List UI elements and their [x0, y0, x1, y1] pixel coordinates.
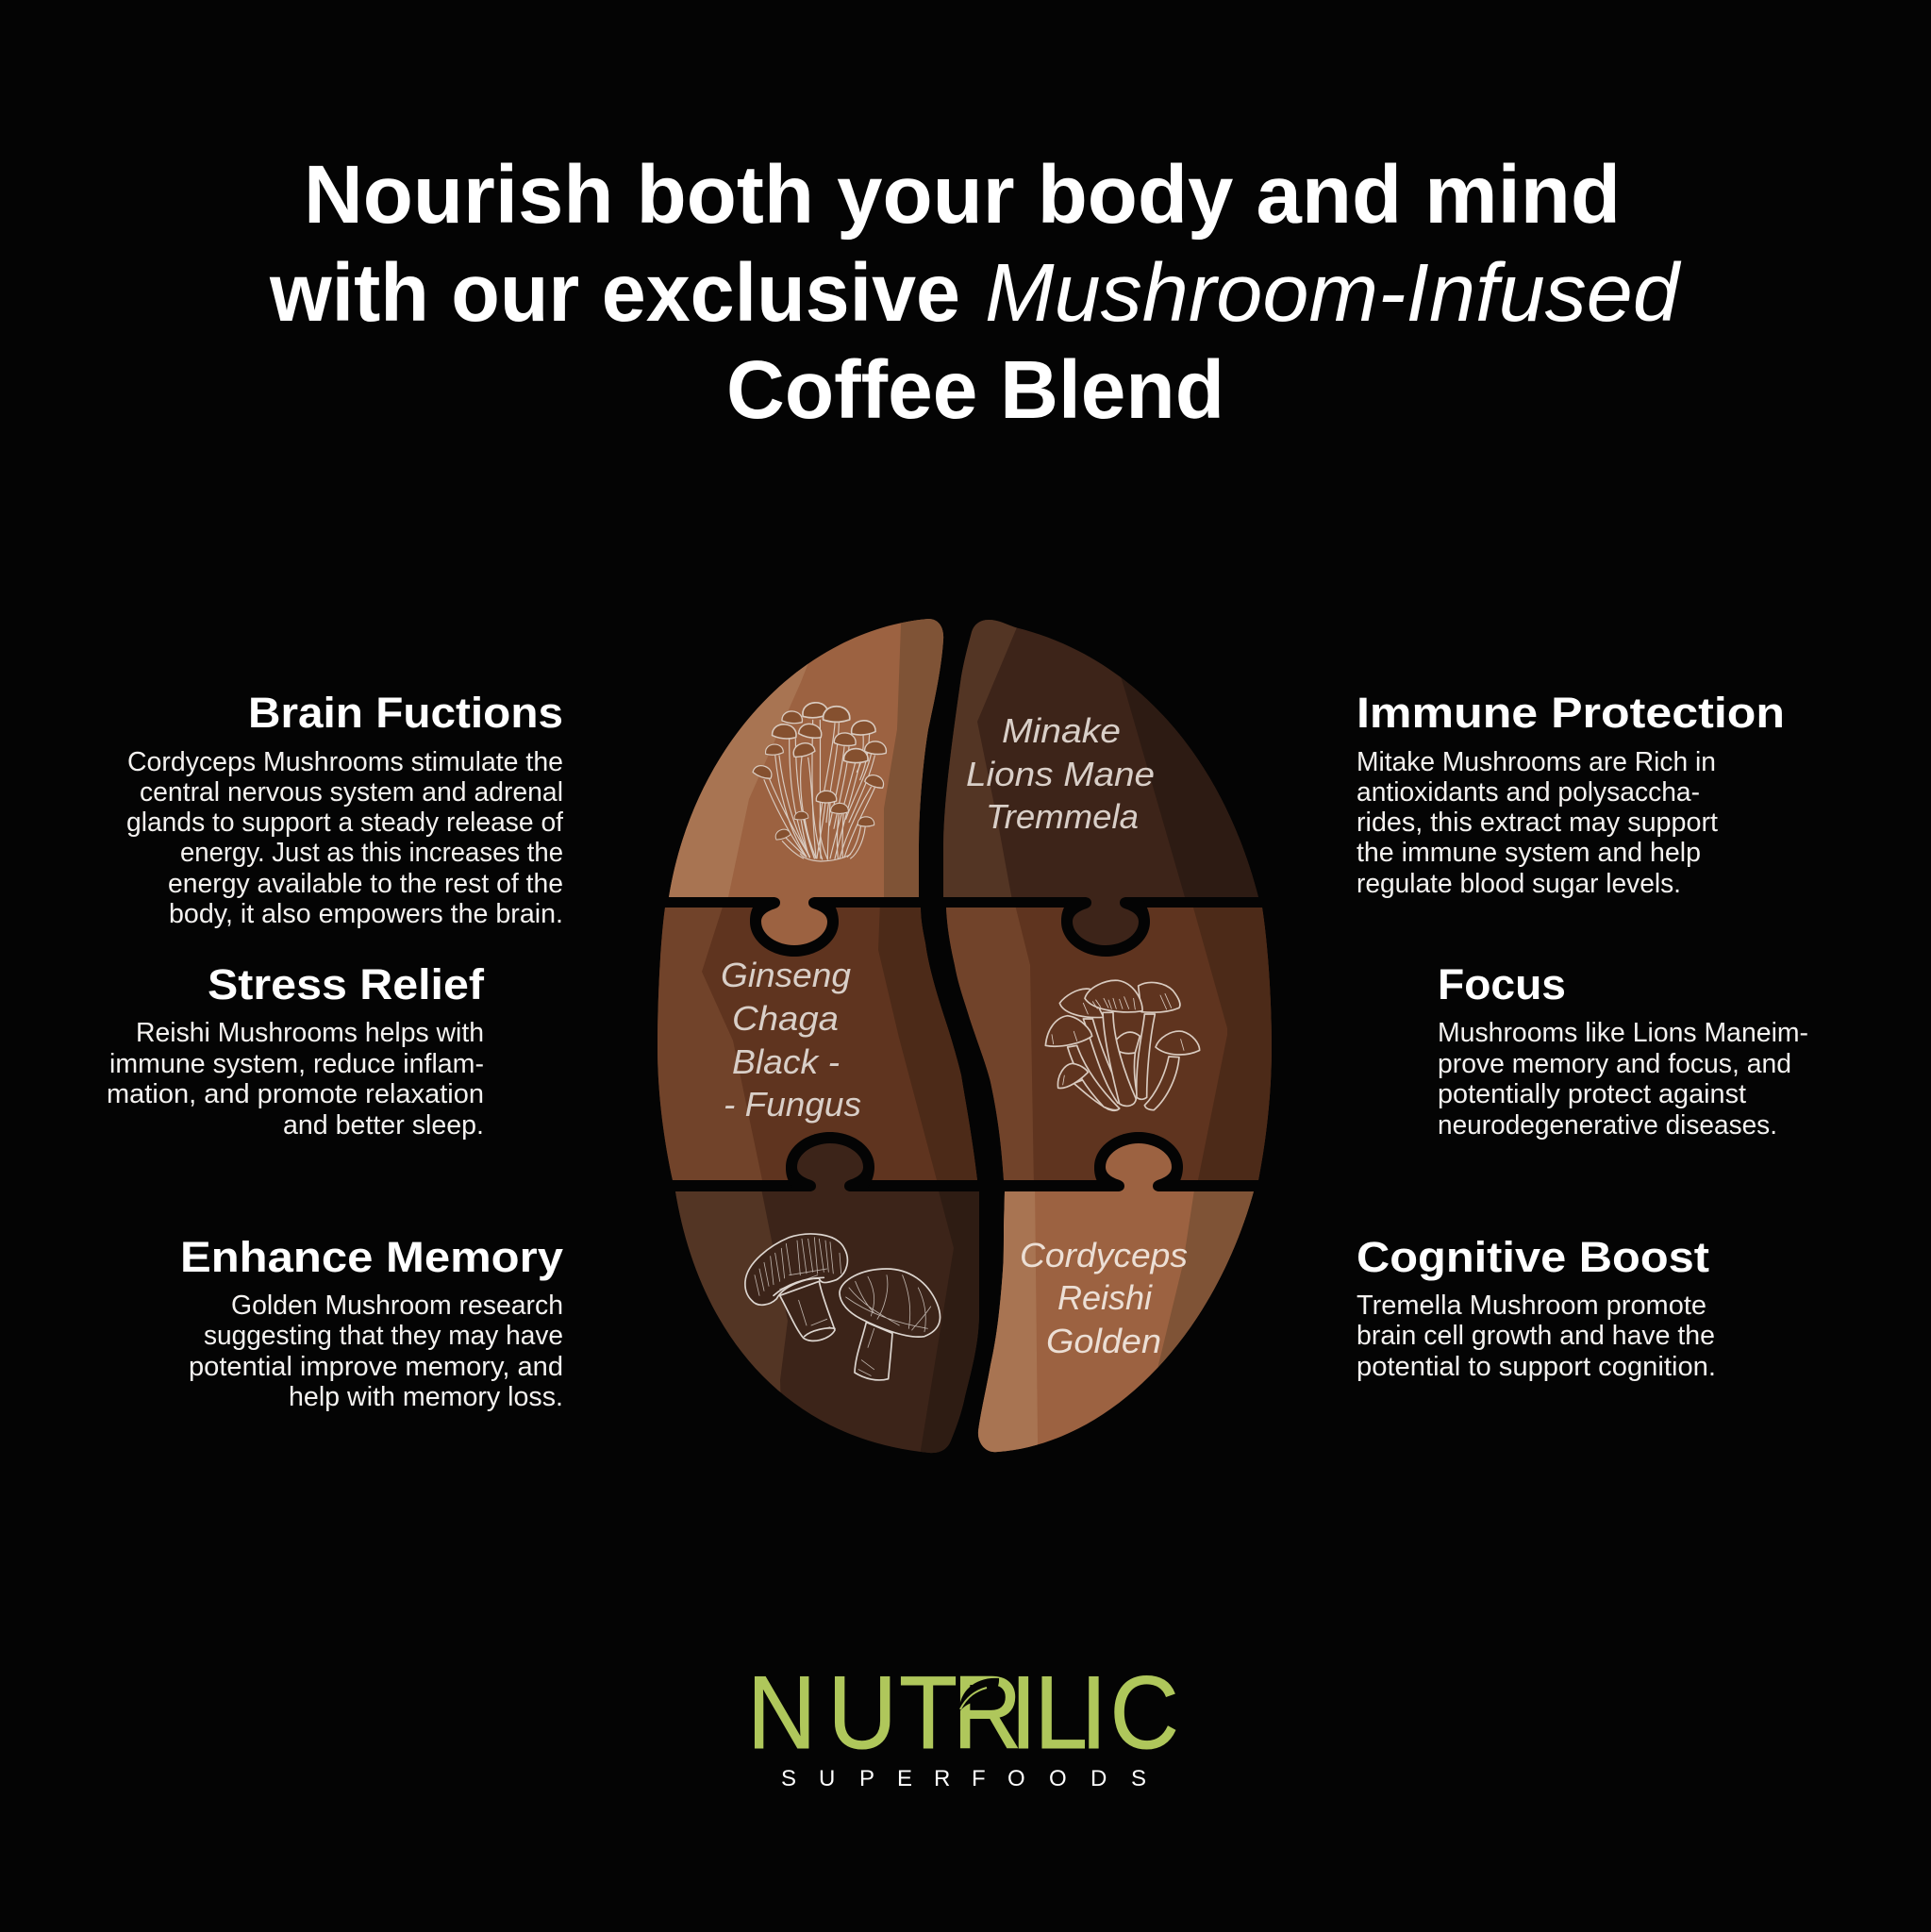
bean piece: middle right	[939, 901, 1278, 1189]
label: minake lions mane tremmela: Tremmela	[986, 797, 1139, 836]
puzzle tab: top left piece	[750, 894, 839, 957]
title: Coffee Blend	[726, 344, 1224, 436]
heading: focus: Focus	[1438, 960, 1566, 1008]
text: brain functions description	[126, 747, 563, 929]
logo tagline: SUPERFOODS	[781, 1766, 1146, 1791]
label: minake lions mane tremmela: Minake	[1002, 711, 1121, 750]
bean piece: bottom left	[675, 1191, 979, 1453]
icon: enoki mushroom cluster	[752, 702, 887, 861]
label: ginseng chaga black fungus: Ginseng	[721, 956, 851, 994]
heading: immune protection: Immune Protection	[1357, 689, 1785, 737]
panel: immune protection	[1357, 689, 1785, 899]
text: stress relief description: and better sleep.	[283, 1110, 484, 1141]
text: focus description: neurodegenerative diseases.	[1438, 1110, 1777, 1141]
title: with our exclusive	[269, 247, 960, 339]
text: immune protection description: antioxidants and polysaccha-	[1357, 777, 1700, 808]
bean piece: middle left	[658, 908, 977, 1180]
logo: nutrilic superfoods	[747, 1655, 1179, 1791]
label: ginseng chaga black fungus: Chaga	[732, 999, 839, 1038]
text: cognitive boost description	[1357, 1291, 1716, 1382]
text: focus description: Mushrooms like Lions Maneim-	[1438, 1018, 1808, 1048]
heading: enhance memory: Enhance Memory	[180, 1233, 563, 1281]
text: stress relief description: immune system, reduce inflam-	[109, 1049, 484, 1079]
icon: leaf in R	[959, 1678, 999, 1712]
text: brain functions description: energy available to the rest of the	[168, 869, 563, 899]
text: enhance memory description: Golden Mushroom research	[231, 1291, 563, 1321]
text: brain functions description: body, it also empowers the brain.	[169, 899, 563, 929]
heading: brain functions: Brain Fuctions	[248, 689, 563, 737]
label: minake lions mane tremmela	[966, 711, 1155, 836]
label: cordyceps reishi golden: Reishi	[1057, 1278, 1153, 1317]
title: Mushroom-Infused	[985, 247, 1682, 339]
text: brain functions description: energy. Just as this increases the	[180, 838, 563, 868]
coffee bean puzzle	[651, 604, 1278, 1462]
label: ginseng chaga black fungus: - Fungus	[724, 1085, 861, 1124]
text: focus description: prove memory and focus, and	[1438, 1049, 1791, 1079]
heading: cognitive boost: Cognitive Boost	[1357, 1233, 1709, 1281]
text: cognitive boost description: Tremella Mushroom promote	[1357, 1291, 1706, 1321]
logo wordmark: NUTRILIC	[747, 1655, 1179, 1771]
panel: brain functions	[126, 689, 563, 929]
text: enhance memory description: help with memory loss.	[289, 1382, 563, 1412]
text: focus description: potentially protect against	[1438, 1079, 1746, 1109]
text: immune protection description: rides, this extract may support	[1357, 808, 1718, 838]
label: cordyceps reishi golden: Golden	[1046, 1322, 1161, 1360]
puzzle tab: bottom left piece	[786, 1132, 874, 1194]
panel: enhance memory	[180, 1233, 563, 1412]
text: enhance memory description: suggesting that they may have	[204, 1321, 563, 1351]
text: stress relief description: mation, and promote relaxation	[107, 1079, 484, 1109]
label: cordyceps reishi golden	[1020, 1236, 1188, 1360]
text: cognitive boost description: brain cell growth and have the	[1357, 1321, 1715, 1351]
text: focus description	[1438, 1018, 1808, 1141]
text: immune protection description: the immune system and help	[1357, 838, 1701, 868]
heading: stress relief: Stress Relief	[208, 960, 485, 1008]
text: immune protection description: Mitake Mushrooms are Rich in	[1357, 747, 1716, 777]
puzzle tab: bottom right piece	[1094, 1132, 1183, 1194]
text: stress relief description: Reishi Mushrooms helps with	[136, 1018, 484, 1048]
bean piece: bottom right	[977, 1191, 1254, 1453]
text: brain functions description: central nervous system and adrenal	[140, 777, 563, 808]
title	[269, 149, 1682, 436]
text: enhance memory description: potential improve memory, and	[189, 1352, 563, 1382]
bean piece: top left	[669, 619, 943, 897]
text: enhance memory description	[189, 1291, 563, 1412]
bean piece: top right	[943, 620, 1258, 897]
label: ginseng chaga black fungus: Black -	[732, 1042, 840, 1081]
puzzle tab: top right piece	[1061, 894, 1150, 957]
text: immune protection description	[1357, 747, 1718, 899]
label: cordyceps reishi golden: Cordyceps	[1020, 1236, 1188, 1274]
label: minake lions mane tremmela: Lions Mane	[966, 755, 1155, 793]
panel: stress relief	[107, 960, 485, 1141]
text: brain functions description: Cordyceps Mushrooms stimulate the	[127, 747, 563, 777]
title: Nourish both your body and mind	[304, 149, 1621, 241]
icon: brown cap mushroom cluster	[1045, 980, 1200, 1110]
text: immune protection description: regulate blood sugar levels.	[1357, 869, 1681, 899]
icon: two button mushrooms	[745, 1234, 941, 1380]
panel: cognitive boost	[1357, 1233, 1716, 1382]
text: stress relief description	[107, 1018, 484, 1141]
text: brain functions description: glands to support a steady release of	[126, 808, 563, 838]
text: cognitive boost description: potential to support cognition.	[1357, 1352, 1716, 1382]
label: ginseng chaga black fungus	[721, 956, 861, 1124]
panel: focus	[1438, 960, 1808, 1141]
